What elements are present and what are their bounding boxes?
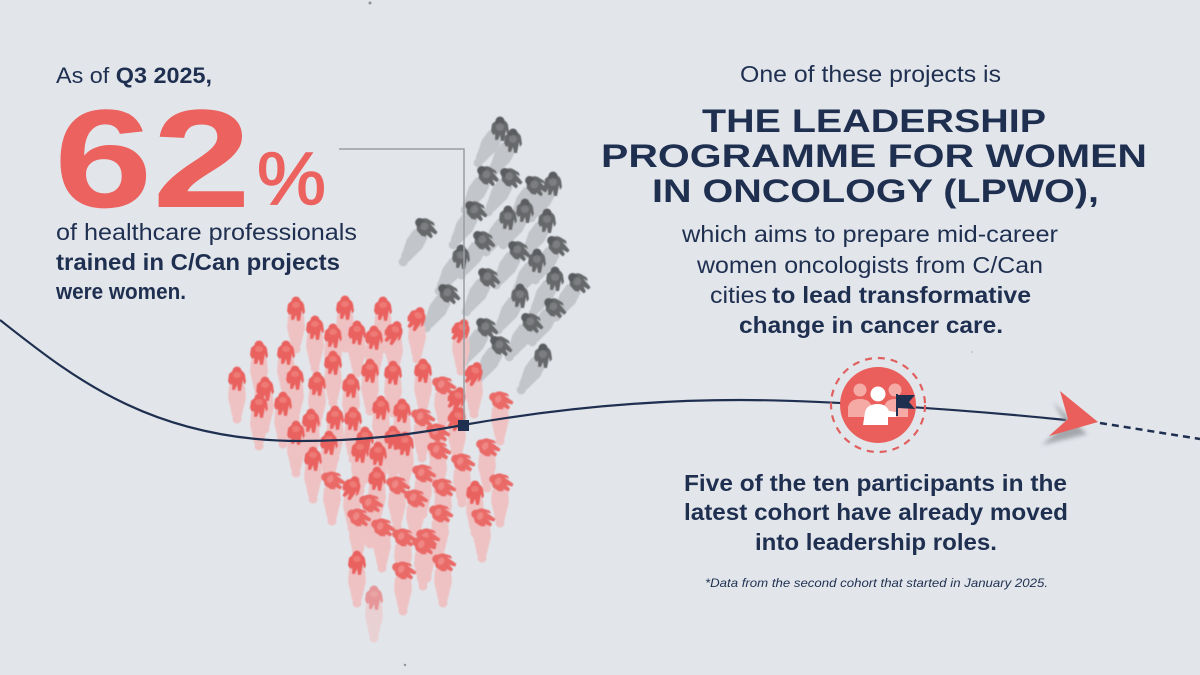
programme description: which aims to prepare mid-career	[681, 221, 1058, 247]
programme title: PROGRAMME FOR WOMEN	[601, 138, 1147, 174]
timeline marker	[458, 420, 469, 431]
programme description: to lead transformative	[772, 282, 1031, 308]
programme description	[681, 221, 1058, 338]
right intro text: One of these projects is	[740, 61, 1001, 87]
programme description: women oncologists from C/Can	[696, 252, 1043, 278]
timeline dashed continuation	[1100, 423, 1200, 439]
programme title: IN ONCOLOGY (LPWO),	[652, 173, 1099, 209]
timeline curve	[0, 320, 1066, 441]
left intro text: As of Q3 2025,	[56, 63, 212, 88]
statistic description: were women.	[55, 279, 186, 304]
cohort outcome callout: into leadership roles.	[755, 529, 997, 555]
cohort outcome callout	[684, 470, 1068, 555]
icon: leadership group with flag	[831, 358, 925, 452]
arrowhead	[1042, 391, 1098, 445]
statistic description: of healthcare professionals	[56, 219, 357, 245]
statistic description	[55, 219, 357, 304]
connector from 62% to timeline	[339, 149, 464, 425]
programme title: THE LEADERSHIP	[702, 103, 1046, 139]
programme title	[601, 103, 1147, 209]
statistic description: trained in C/Can projects	[56, 249, 340, 275]
programme description: change in cancer care.	[739, 312, 1003, 338]
crowd: grey figures	[393, 116, 594, 398]
big statistic 62%: %	[257, 137, 326, 220]
big statistic 62%	[54, 80, 326, 237]
programme description: cities	[710, 282, 767, 308]
footnote: *Data from the second cohort that started in January 2025.	[705, 576, 1048, 590]
cohort outcome callout: latest cohort have already moved	[684, 499, 1068, 525]
big statistic 62%: 62	[54, 80, 251, 237]
cohort outcome callout: Five of the ten participants in the	[684, 470, 1067, 496]
crowd: coral figures	[228, 296, 516, 643]
